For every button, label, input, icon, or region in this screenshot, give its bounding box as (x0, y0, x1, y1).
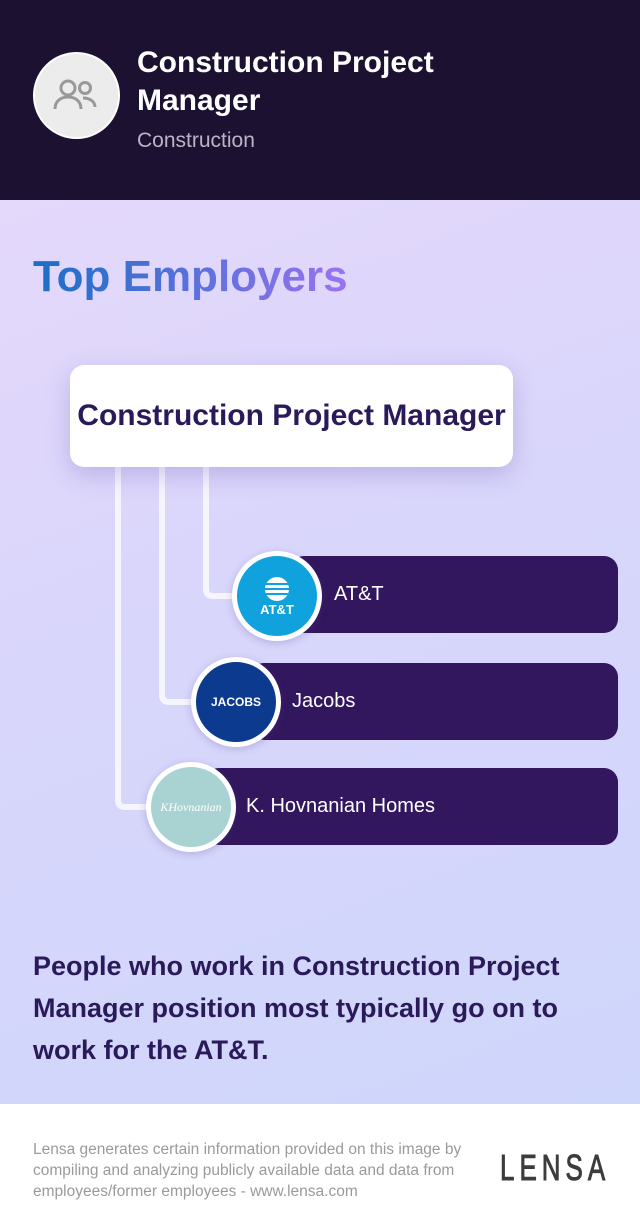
heading: top employers: Top Employers (33, 252, 348, 301)
body background (0, 200, 640, 1104)
icon: Hovnanian logo (146, 762, 236, 852)
logo: LENSA: LENSA (500, 1147, 610, 1188)
icon: AT&T logo: AT&T (260, 602, 294, 616)
card: role: Construction Project Manager (77, 399, 506, 432)
row: AT&T: AT&T (334, 583, 384, 605)
icon: AT&T logo (232, 551, 322, 641)
header (0, 0, 640, 200)
row: K. Hovnanian: K. Hovnanian Homes (246, 795, 435, 817)
footer disclaimer: Lensa generates certain information provided on this image by compiling and analyzing publicly available data and data from employees/former employees - www.lensa.com (33, 1141, 461, 1200)
title: Construction Project Manager (137, 46, 434, 117)
row: K. Hovnanian (142, 760, 618, 858)
row: Jacobs: Jacobs (292, 690, 355, 712)
summary text: People who work in Construction Project Manager position most typically go on to work for the AT&T. (33, 951, 560, 1065)
subtitle: Construction (137, 129, 255, 152)
icon: Hovnanian logo: KHovnanian (160, 800, 222, 814)
card: role (70, 365, 513, 467)
row: Jacobs (188, 656, 618, 752)
row: AT&T (228, 550, 618, 646)
icon: Jacobs logo (191, 657, 281, 747)
icon: Jacobs logo: JACOBS (211, 695, 261, 709)
icon: avatar (33, 52, 120, 139)
